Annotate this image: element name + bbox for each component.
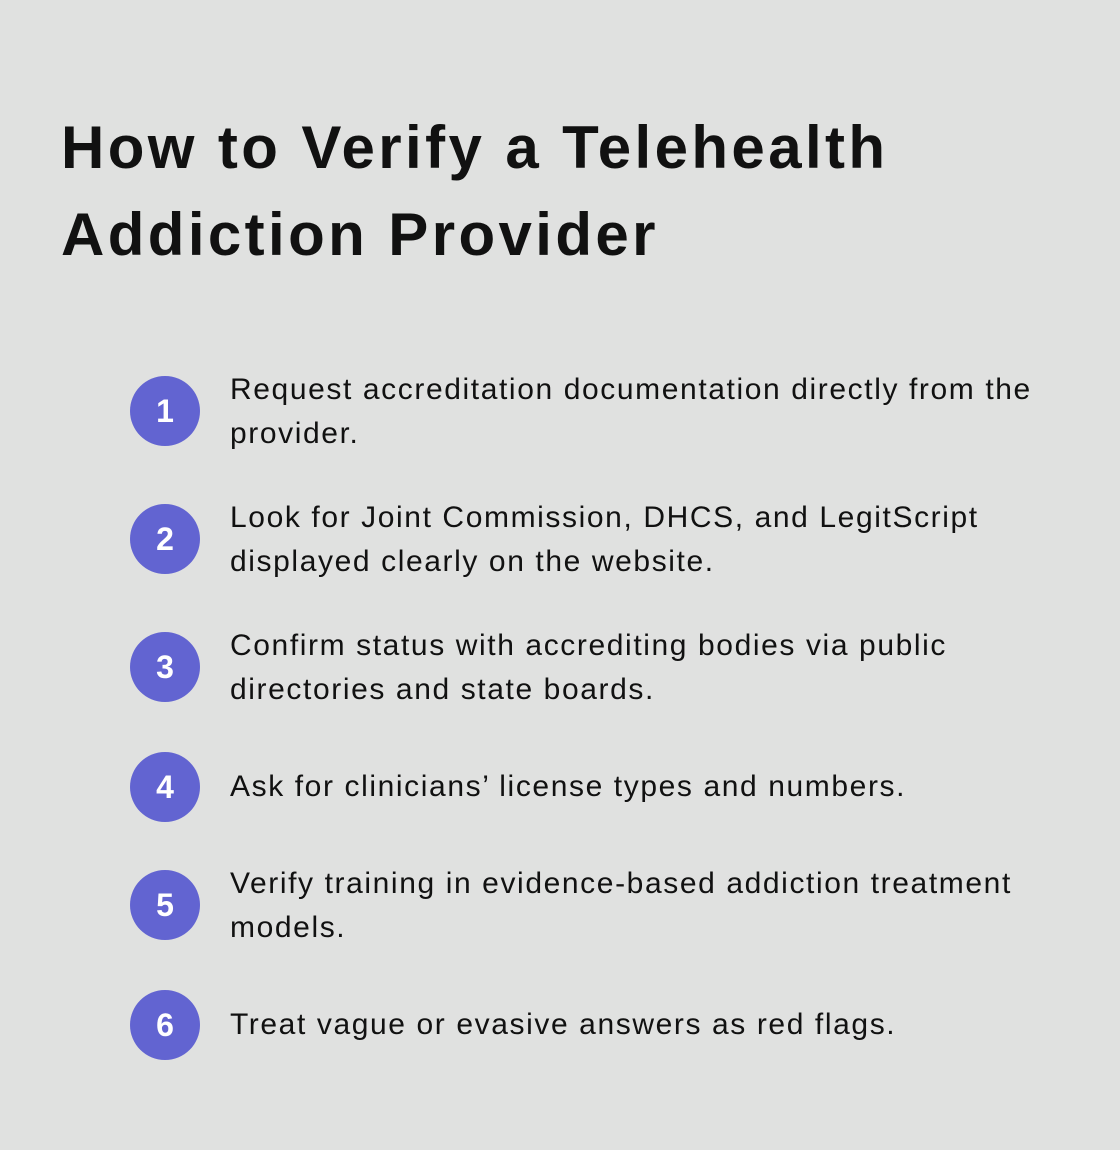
step 3: Confirm status with accrediting bodies via public [230, 629, 947, 662]
title: How to Verify a Telehealth [61, 114, 888, 181]
step 1: provider. [230, 417, 359, 450]
step 4: 4 [156, 769, 174, 805]
step 4 [130, 752, 906, 822]
title: Addiction Provider [61, 201, 659, 268]
step 1: Request accreditation documentation directly from the [230, 373, 1032, 406]
step 5: models. [230, 911, 346, 944]
step 3: 3 [156, 649, 174, 685]
step 6: 6 [156, 1007, 174, 1043]
step 2: displayed clearly on the website. [230, 545, 715, 578]
step 5: Verify training in evidence-based addiction treatment [230, 867, 1012, 900]
step 1: 1 [156, 393, 174, 429]
step 3 [130, 629, 947, 706]
step 5: 5 [156, 887, 174, 923]
step 1 [130, 373, 1032, 450]
step 6: Treat vague or evasive answers as red flags. [230, 1008, 896, 1041]
title [61, 114, 888, 268]
step 2: Look for Joint Commission, DHCS, and LegitScript [230, 501, 979, 534]
step 4: Ask for clinicians’ license types and numbers. [230, 770, 906, 803]
step 6 [130, 990, 896, 1060]
step 5 [130, 867, 1012, 944]
step 3: directories and state boards. [230, 673, 655, 706]
step 2 [130, 501, 979, 578]
step 2: 2 [156, 521, 174, 557]
